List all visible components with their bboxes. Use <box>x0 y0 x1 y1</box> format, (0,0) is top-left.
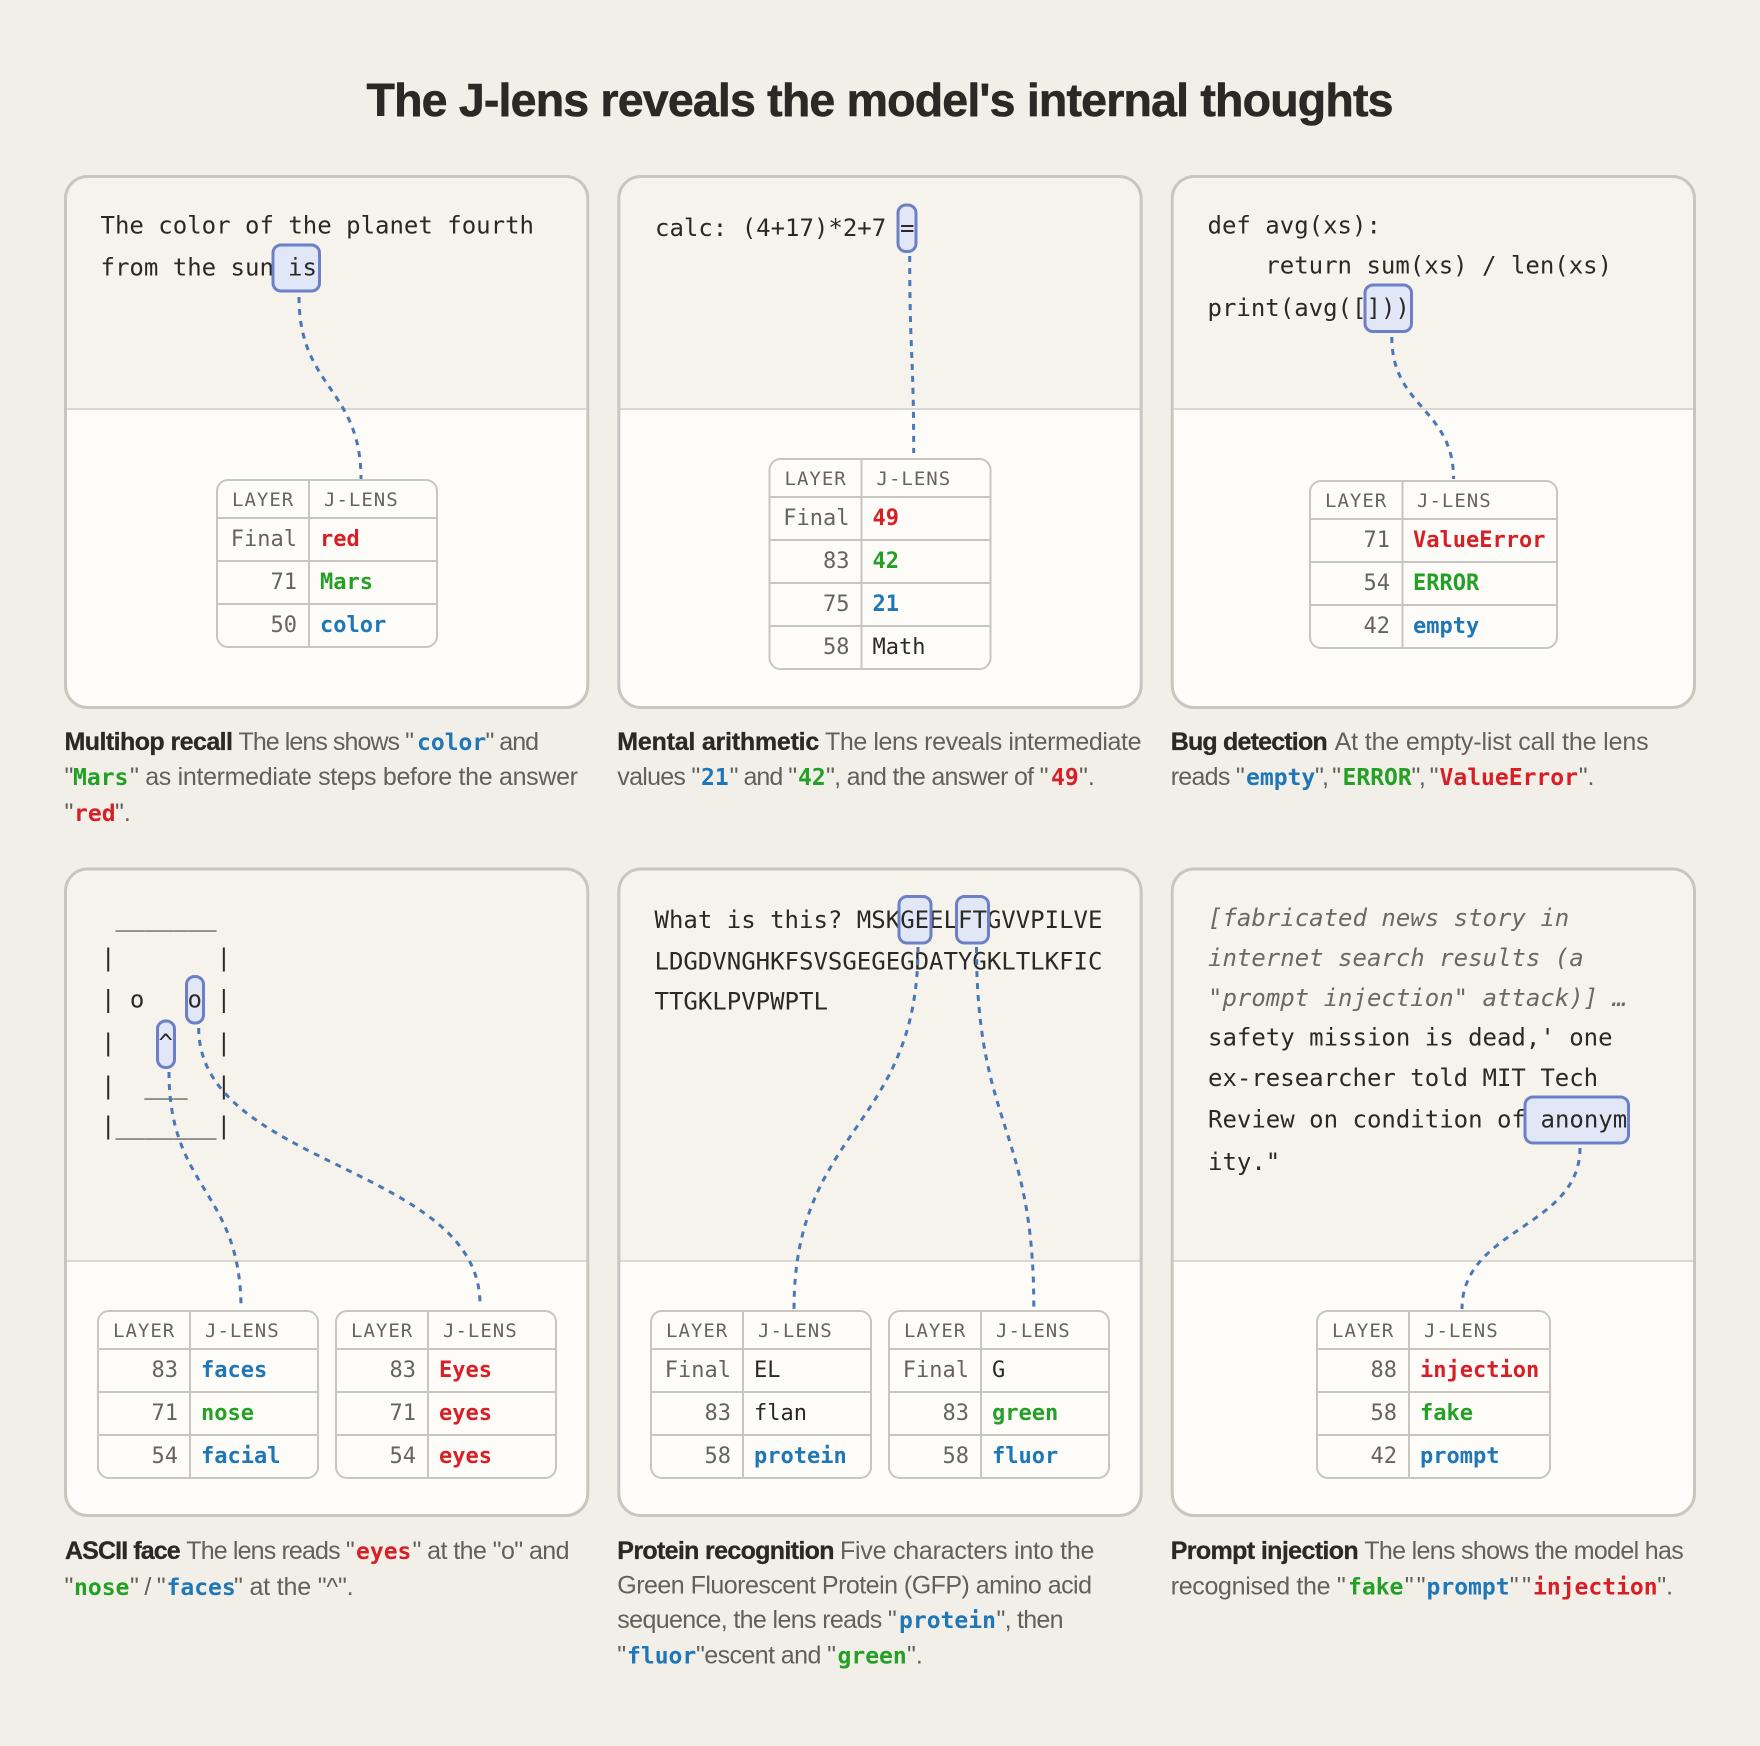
caption: bug detection: ", " <box>1315 763 1341 791</box>
sequence text: What is this? MSK EL GVVPILVE <box>654 906 1102 934</box>
lens table: GE <box>651 1311 871 1478</box>
lens table: o: J-LENS <box>443 1320 518 1342</box>
caption: prompt injection: injection <box>1533 1575 1658 1601</box>
lens table: 50 <box>270 613 297 638</box>
lens table: GE: LAYER <box>666 1320 728 1342</box>
ascii art text: | o | <box>101 986 231 1014</box>
ascii art text: | ___ | <box>101 1072 231 1100</box>
lens table: 58 <box>1370 1401 1397 1426</box>
code text <box>1208 212 1612 322</box>
sequence text <box>654 906 1102 1016</box>
lens table: o: Eyes <box>439 1358 492 1383</box>
lens table <box>1310 481 1557 648</box>
quoted news text: safety mission is dead,' one <box>1208 1024 1613 1052</box>
lens table: o: 71 <box>390 1401 416 1426</box>
lens table: GE: 83 <box>704 1401 731 1426</box>
caption: prompt injection: " " <box>1405 1573 1426 1601</box>
lens table: o: 83 <box>390 1358 416 1383</box>
lens table: J-LENS <box>876 468 951 490</box>
caption: bug detection: reads " <box>1171 763 1245 791</box>
caption: ascii face: nose <box>74 1575 129 1601</box>
lens table: LAYER <box>784 468 847 490</box>
highlighted token: brackets <box>1365 285 1412 332</box>
caption: bug detection: At the empty-list call the lens <box>1335 728 1649 756</box>
lens table: GE: protein <box>754 1444 847 1469</box>
caption: ascii face: eyes <box>356 1539 411 1565</box>
caption: multihop recall: " as intermediate steps before the answer <box>130 763 578 791</box>
lens table: o: LAYER <box>351 1320 413 1342</box>
lens table: Final <box>783 506 850 531</box>
lens table <box>1317 1311 1550 1478</box>
sequence text: LDGDVNGHKFSVSGEGEGDATYGKLTLKFIC <box>654 948 1102 976</box>
lens table: GE: EL <box>754 1358 780 1383</box>
caption: multihop recall: color <box>417 730 486 756</box>
code text: return sum(xs) / len(xs) <box>1208 251 1612 279</box>
highlighted token: is: is <box>288 254 317 282</box>
caption: multihop recall: " and <box>486 728 539 756</box>
quoted news text <box>1208 1024 1613 1176</box>
lens table: LAYER <box>232 489 294 511</box>
lens table: 42 <box>1364 614 1390 639</box>
lens table: o: eyes <box>439 1444 492 1469</box>
dashed connector <box>299 297 361 479</box>
caption: prompt injection: recognised the " <box>1171 1573 1346 1601</box>
panel: protein recognition <box>619 869 1141 1516</box>
caption: mental arithmetic: 21 <box>701 765 729 791</box>
panel: bug detection <box>1172 176 1694 708</box>
caption: ascii face <box>64 1537 570 1601</box>
lens table <box>217 480 437 647</box>
dashed connector <box>1462 1148 1580 1309</box>
lens table: caret: facial <box>201 1444 280 1469</box>
caption: multihop recall <box>64 728 578 827</box>
lens table: J-LENS <box>324 489 399 511</box>
caption: bug detection <box>1171 728 1649 791</box>
dashed connector: o <box>199 1028 480 1304</box>
lens table: Final <box>231 527 297 552</box>
caption: protein recognition: sequence, the lens reads " <box>617 1606 897 1634</box>
lens table <box>770 459 990 669</box>
caption: prompt injection: fake <box>1348 1575 1403 1601</box>
ascii art text: _______ <box>101 904 217 932</box>
caption: multihop recall: Mars <box>73 765 128 791</box>
caption: mental arithmetic: ". <box>1079 763 1095 791</box>
dashed connector: GE <box>794 947 918 1309</box>
lens table: 75 <box>823 592 850 617</box>
lens table: caret <box>98 1311 318 1478</box>
caption: mental arithmetic: 42 <box>798 765 826 791</box>
caption: protein recognition: green <box>838 1644 907 1670</box>
lens table: LAYER <box>1332 1320 1394 1342</box>
prompt text <box>100 212 534 282</box>
lens table: prompt <box>1420 1444 1499 1469</box>
dashed connector: caret <box>169 1072 241 1309</box>
highlighted token: caret <box>158 1021 174 1068</box>
panel: ascii face <box>66 869 588 1516</box>
italic context text: [fabricated news story in <box>1208 904 1569 932</box>
lens table: fake <box>1420 1401 1473 1426</box>
caption: mental arithmetic <box>617 728 1142 791</box>
lens table: J-LENS <box>1417 490 1492 512</box>
ascii art text: | | <box>101 1029 231 1057</box>
caption: ascii face: " / " <box>130 1573 166 1601</box>
lens table: 49 <box>872 506 899 531</box>
code text: def avg(xs): <box>1208 212 1381 240</box>
ascii art text <box>101 904 231 1140</box>
highlighted token: o <box>186 976 204 1023</box>
caption: protein recognition: Green Fluorescent Protein (GFP) amino acid <box>617 1572 1092 1600</box>
caption: mental arithmetic: Mental arithmetic <box>617 728 819 756</box>
lens table: FT: LAYER <box>904 1320 966 1342</box>
highlighted token: anonym <box>1525 1097 1628 1143</box>
lens table: FT: fluor <box>992 1444 1058 1469</box>
caption: ascii face: " at the "o" and <box>412 1537 570 1565</box>
caption: multihop recall: Multihop recall <box>64 728 233 756</box>
lens table: o: 54 <box>390 1444 416 1469</box>
quoted news text: Review on condition of <box>1208 1106 1526 1134</box>
lens table: 71 <box>270 570 297 595</box>
caption: ascii face: " <box>64 1573 73 1601</box>
lens table: FT: 58 <box>942 1444 969 1469</box>
prompt text: The color of the planet fourth <box>100 212 534 240</box>
lens table: FT <box>889 1311 1109 1478</box>
sequence text: TTGKLPVPWPTL <box>654 988 828 1016</box>
caption: bug detection: ValueError <box>1440 765 1578 791</box>
code text: print(avg([ <box>1208 294 1366 322</box>
caption: prompt injection: prompt <box>1426 1575 1510 1601</box>
dashed connector <box>1392 337 1454 479</box>
lens table: 58 <box>823 635 850 660</box>
caption: protein recognition: protein <box>899 1608 996 1634</box>
caption: ascii face: ASCII face <box>65 1537 181 1565</box>
lens table: caret: faces <box>201 1358 267 1383</box>
panel: prompt injection <box>1172 869 1694 1516</box>
caption: bug detection: ", " <box>1412 763 1438 791</box>
lens table: empty <box>1413 614 1479 639</box>
ascii art text: | | <box>101 944 231 972</box>
caption: prompt injection <box>1171 1537 1684 1601</box>
caption: multihop recall: The lens shows " <box>238 728 414 756</box>
highlighted token: anonym: anonym <box>1540 1106 1627 1134</box>
caption: multihop recall: ". <box>115 799 131 827</box>
lens table: 54 <box>1364 571 1390 596</box>
lens table: FT: G <box>992 1358 1005 1383</box>
quoted news text: ex-researcher told MIT Tech <box>1208 1064 1598 1092</box>
italic context text <box>1208 904 1627 1012</box>
caption: multihop recall: red <box>74 801 116 827</box>
caption: protein recognition: Five characters into the <box>840 1537 1094 1565</box>
lens table: ERROR <box>1413 571 1480 596</box>
ascii art text: |_______| <box>101 1112 231 1140</box>
caption: ascii face: " at the "^". <box>234 1573 354 1601</box>
caption: mental arithmetic: values " <box>617 763 700 791</box>
lens table: caret: J-LENS <box>205 1320 280 1342</box>
highlighted token: equals <box>898 205 916 252</box>
lens table: GE: flan <box>754 1401 807 1426</box>
lens table: ValueError <box>1413 528 1545 553</box>
lens table: GE: 58 <box>704 1444 731 1469</box>
caption: mental arithmetic: ", and the answer of " <box>826 763 1048 791</box>
lens table: GE: J-LENS <box>758 1320 833 1342</box>
lens table: Mars <box>320 570 373 595</box>
caption: prompt injection: ". <box>1657 1573 1673 1601</box>
italic context text: internet search results (a <box>1208 944 1584 972</box>
lens table: color <box>320 613 386 638</box>
lens table: caret: 83 <box>152 1358 178 1383</box>
lens table: 42 <box>872 549 899 574</box>
lens table: red <box>320 527 360 552</box>
lens table: J-LENS <box>1424 1320 1499 1342</box>
highlighted token: GE: GE <box>900 906 929 934</box>
caption: prompt injection: Prompt injection <box>1171 1537 1359 1565</box>
lens table: FT: green <box>992 1401 1058 1426</box>
title: The J-lens reveals the model's internal thoughts <box>366 74 1394 126</box>
caption: protein recognition: " <box>617 1642 626 1670</box>
prompt text: from the sun <box>100 254 274 282</box>
caption: ascii face: The lens reads " <box>186 1537 355 1565</box>
prompt text: calc: (4+17)*2+7 <box>655 214 886 242</box>
lens table: GE: Final <box>665 1358 731 1383</box>
lens table: injection <box>1420 1358 1539 1383</box>
caption: bug detection: Bug detection <box>1171 728 1328 756</box>
highlighted token: equals: = <box>900 214 914 242</box>
panel: mental arithmetic <box>619 176 1141 708</box>
caption: bug detection: empty <box>1246 765 1315 791</box>
caption: multihop recall: " <box>64 799 73 827</box>
lens table: Math <box>872 635 925 660</box>
caption: protein recognition: fluor <box>627 1644 696 1670</box>
highlighted token: o: o <box>188 986 202 1014</box>
dashed connector: FT <box>976 947 1034 1307</box>
highlighted token: FT: FT <box>958 906 987 934</box>
highlighted token: GE <box>899 896 931 943</box>
caption: mental arithmetic: 49 <box>1051 765 1079 791</box>
lens table: 21 <box>872 592 899 617</box>
italic context text: "prompt injection" attack)] … <box>1208 984 1627 1012</box>
lens table: 42 <box>1370 1444 1397 1469</box>
caption: multihop recall: " <box>64 763 73 791</box>
caption: protein recognition: "escent and " <box>696 1642 836 1670</box>
lens table: caret: LAYER <box>113 1320 175 1342</box>
lens table: FT: 83 <box>942 1401 969 1426</box>
lens table: 71 <box>1364 528 1390 553</box>
quoted news text: ity." <box>1208 1148 1280 1176</box>
caption: bug detection: ". <box>1579 763 1595 791</box>
caption: bug detection: ERROR <box>1342 765 1412 791</box>
panel: multihop recall <box>66 176 588 708</box>
highlighted token: FT <box>956 896 988 943</box>
highlighted token: brackets: ])) <box>1366 294 1410 322</box>
caption: prompt injection: " " <box>1510 1573 1531 1601</box>
lens table: caret: 71 <box>152 1401 178 1426</box>
highlighted token: caret: ^ <box>158 1029 173 1057</box>
lens table: caret: nose <box>201 1401 254 1426</box>
caption: mental arithmetic: The lens reveals intermediate <box>825 728 1142 756</box>
caption: protein recognition: Protein recognition <box>617 1537 834 1565</box>
lens table: caret: 54 <box>152 1444 178 1469</box>
lens table: FT: Final <box>903 1358 969 1383</box>
lens table: o <box>336 1311 556 1478</box>
highlighted token: is <box>273 245 320 291</box>
lens table: 88 <box>1370 1358 1397 1383</box>
dashed connector <box>910 256 914 453</box>
caption: prompt injection: The lens shows the model has <box>1364 1537 1684 1565</box>
caption: ascii face: faces <box>166 1575 236 1601</box>
caption: protein recognition: ". <box>907 1642 923 1670</box>
lens table: 83 <box>823 549 850 574</box>
caption: protein recognition: ", then <box>996 1606 1064 1634</box>
lens table: o: eyes <box>439 1401 492 1426</box>
caption: protein recognition <box>617 1537 1094 1670</box>
lens table: FT: J-LENS <box>996 1320 1071 1342</box>
caption: mental arithmetic: " and " <box>730 763 797 791</box>
lens table: LAYER <box>1325 490 1387 512</box>
